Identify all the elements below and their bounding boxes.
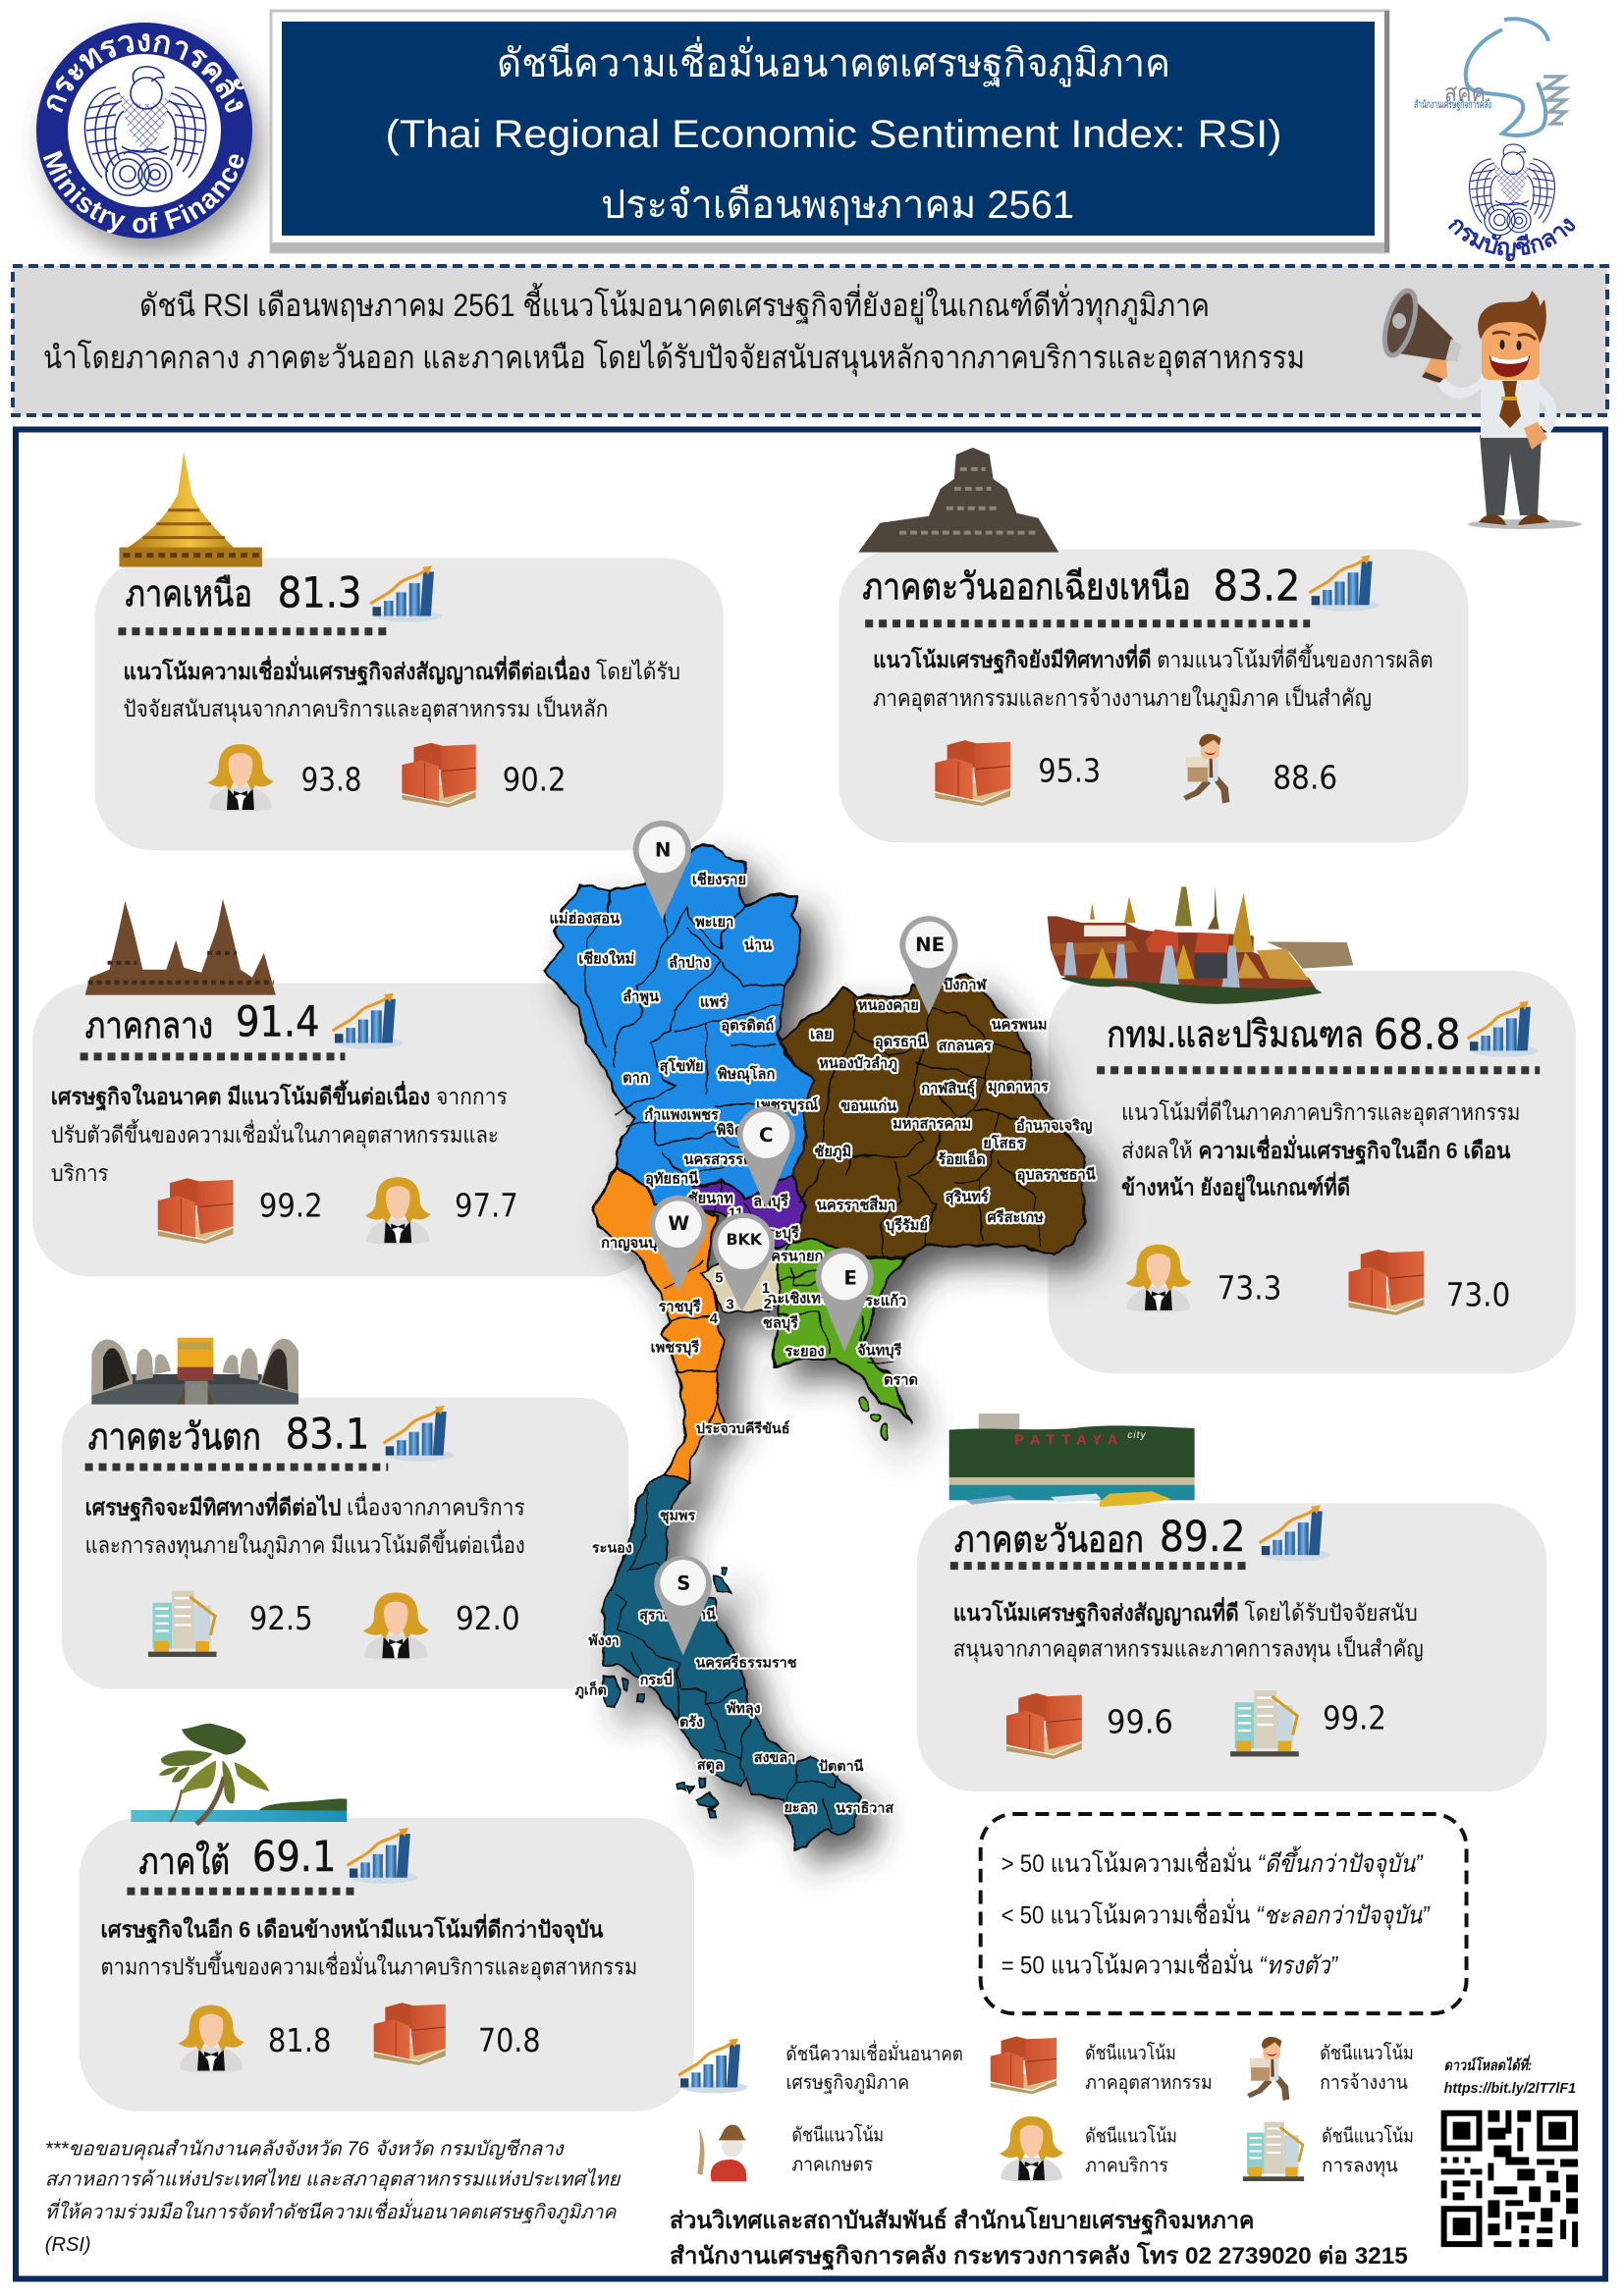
province labels north, central, west, east: พิจิตร [717, 1122, 751, 1139]
logo: FPO swirl: สำนักงานเศรษฐกิจการคลัง [1414, 99, 1491, 111]
province boundaries south [616, 1485, 838, 1828]
icon: industry [935, 740, 1010, 806]
province labels north, central, west, east: หนองบัวลำภู [819, 1055, 897, 1073]
province labels north, central, west, east: เลย [810, 1028, 833, 1043]
main frame [16, 430, 1605, 2279]
download note: https://bit.ly/2lT7lF1 [1444, 2080, 1576, 2097]
description 2: ปรับตัวดีขึ้นของความเชื่อมั่นในภาคอุตสาหกรรมและ [51, 1119, 499, 1148]
key: industry index [991, 2037, 1213, 2095]
service value: 73.3 [1218, 1269, 1281, 1307]
image: Ayutthaya ruins [85, 899, 276, 995]
province labels north, central, west, east: เพชรบุรี [651, 1340, 699, 1357]
key: service index: ดัชนีแนวโน้ม [1085, 2125, 1177, 2148]
heading: ภาคตะวันออก [954, 1520, 1144, 1561]
province labels north, central, west, east: ศรีสะเกษ [987, 1209, 1044, 1226]
logo: FPO swirl [1414, 19, 1565, 135]
index value: 91.4 [236, 997, 320, 1046]
panel: Central [32, 899, 658, 1276]
province labels south: ภูเก็ต [574, 1681, 607, 1699]
province labels north, central, west, east: ลพบุรี [753, 1194, 788, 1210]
province labels south: ตรัง [679, 1715, 703, 1731]
icon: service [363, 1592, 429, 1660]
province labels south: ระนอง [592, 1541, 632, 1557]
description bold: แนวโน้มความเชื่อมั่นเศรษฐกิจส่งสัญญาณที่ดีต่อเนื่อง โดยได้รับ [123, 656, 680, 686]
index value: 89.2 [1160, 1513, 1246, 1562]
province labels north, central, west, east: ระยอง [785, 1345, 825, 1361]
province labels north, central, west, east: สุโขทัย [660, 1057, 704, 1075]
province labels north, central, west, east: เพชรบูรณ์ [756, 1096, 819, 1115]
province labels north, central, west, east: ลำปาง [669, 954, 710, 971]
heading: ภาคกลาง [85, 1005, 213, 1046]
province labels north, central, west, east: ตาก [623, 1071, 649, 1087]
province labels north, central, west, east: สุรินทร์ [946, 1188, 989, 1205]
heading: กทม.และปริมณฑล [1107, 1014, 1364, 1055]
province labels north, central, west, east: แม่ฮ่องสอน [549, 912, 620, 928]
contact footer: ส่วนวิเทศและสถาบันสัมพันธ์ สำนักนโยบายเศรษฐกิจมหภาค [670, 2206, 1254, 2236]
key: industry index: ภาคอุตสาหกรรม [1085, 2072, 1213, 2095]
key: investment index [1243, 2122, 1414, 2181]
province labels north, central, west, east: อุดรธานี [875, 1034, 927, 1050]
region: central (purple) [691, 1176, 806, 1250]
logo: Comptroller General's Department: กรมบัญชีกลาง [1447, 218, 1575, 261]
panel: Bangkok and vicinity [1048, 886, 1576, 1373]
province labels north, central, west, east: ฉะเชิงเทรา [767, 1290, 837, 1307]
icon: service [365, 1177, 431, 1245]
province labels north, central, west, east: หนองคาย [858, 998, 919, 1014]
key: service index: ภาคบริการ [1085, 2155, 1168, 2176]
province labels north, central, west, east: 3 [726, 1298, 734, 1313]
region: south (teal) [602, 1475, 861, 1847]
pin: NE [899, 916, 958, 1015]
icon: industry [374, 2002, 446, 2065]
acknowledgement note: ***ขอขอบคุณสำนักงานคลังจังหวัด 76 จังหวัด กรมบัญชีกลาง [45, 2139, 565, 2162]
province boundaries north and northeast [584, 884, 1064, 1362]
title banner [271, 11, 1389, 252]
province labels south: สงขลา [754, 1750, 795, 1766]
icon: investment [148, 1591, 216, 1657]
index value: 83.2 [1214, 561, 1300, 611]
province labels north, central, west, east: สระบุรี [758, 1225, 799, 1242]
legend box: index thresholds [981, 1814, 1467, 2013]
acknowledgement note [45, 2139, 622, 2256]
province labels north, central, west, east: 5 [715, 1270, 724, 1286]
province labels south: สุราษฎร์ธานี [639, 1605, 716, 1623]
industry value: 95.3 [1038, 753, 1101, 790]
investment value: 92.5 [249, 1600, 313, 1637]
province labels north, central, west, east: สระแก้ว [856, 1293, 906, 1309]
province labels north, central, west, east: ร้อยเอ็ด [938, 1149, 986, 1168]
image: Grand Palace [1048, 886, 1353, 1004]
region: south islands [604, 1568, 730, 1818]
province labels south: นครศรีธรรมราช [696, 1654, 797, 1671]
legend line below 50: < 50 แนวโน้มความเชื่อมั่น “ชะลอกว่าปัจจุบัน” [1001, 1898, 1431, 1931]
summary panel [13, 266, 1607, 415]
region: west (orange) [594, 1166, 723, 1423]
heading: ภาคใต้ [138, 1841, 230, 1883]
region: northeast (brown) [779, 974, 1085, 1257]
download note: ดาวน์โหลดได้ที่: [1444, 2055, 1532, 2074]
legend line above 50: > 50 แนวโน้มความเชื่อมั่น “ดีขึ้นกว่าปัจจุบัน” [1001, 1845, 1424, 1879]
acknowledgement note: (RSI) [45, 2234, 91, 2256]
index value: 68.8 [1374, 1010, 1461, 1059]
province labels north, central, west, east: จันทบุรี [857, 1342, 902, 1359]
panel: North [95, 452, 724, 850]
region: Bangkok metropolitan (tan) [701, 1261, 779, 1311]
acknowledgement note: ที่ให้ความร่วมมือในการจัดทำดัชนีความเชื่อมั่นอนาคตเศรษฐกิจภูมิภาค [45, 2198, 617, 2224]
province labels north, central, west, east: นครพนม [992, 1017, 1048, 1033]
summary line 2: นำโดยภาคกลาง ภาคตะวันออก และภาคเหนือ โดยได้รับปัจจัยสนับสนุนหลักจากภาคบริการและอุตสาหกรรม [43, 340, 1305, 377]
index value: 81.3 [278, 568, 361, 617]
industry value: 73.0 [1446, 1276, 1510, 1313]
region: east (green) [773, 1240, 911, 1425]
pin: W: W [668, 1212, 689, 1235]
icon: service [179, 2005, 244, 2072]
investment value: 99.2 [1323, 1699, 1386, 1736]
industry value: 90.2 [503, 762, 567, 799]
logo: Ministry of Finance seal: กระทรวงการคลัง [47, 33, 244, 113]
province labels north, central, west, east: อุตรดิตถ์ [721, 1016, 774, 1034]
province labels north, central, west, east: ชัยภูมิ [814, 1144, 851, 1161]
pin: C [737, 1106, 795, 1208]
key: employment index: ดัชนีแนวโน้ม [1320, 2042, 1414, 2064]
icon: industry [402, 743, 476, 807]
province labels north, central, west, east: 11 [729, 1205, 743, 1221]
heading: ภาคตะวันตก [88, 1417, 261, 1459]
province labels north, central, west, east: ลำพูน [623, 988, 659, 1006]
description bold: เศรษฐกิจในอีก 6 เดือนข้างหน้ามีแนวโน้มที่ดีกว่าปัจจุบัน [101, 1913, 604, 1944]
pin: W [649, 1196, 708, 1292]
description: ปัจจัยสนับสนุนจากภาคบริการและอุตสาหกรรม เป็นหลัก [123, 694, 608, 722]
province labels north, central, west, east: เชียงใหม่ [578, 949, 634, 967]
province labels north, central, west, east: มุกดาหาร [988, 1080, 1049, 1095]
key: agriculture index: ภาคเกษตร [792, 2154, 873, 2175]
region: east islands [858, 1396, 888, 1439]
province labels north, central, west, east: พิษณุโลก [718, 1065, 776, 1083]
province labels south: กระบี่ [640, 1669, 673, 1688]
description line 2: ส่งผลให้ ความเชื่อมั่นเศรษฐกิจในอีก 6 เดือน [1121, 1135, 1511, 1165]
employment value: 88.6 [1272, 760, 1337, 797]
map of Thailand [546, 821, 1096, 1847]
title line 1: ดัชนีความเชื่อมั่นอนาคตเศรษฐกิจภูมิภาค [497, 36, 1170, 87]
province labels north, central, west, east: 4 [710, 1311, 719, 1327]
icon: service [1125, 1245, 1191, 1312]
region panels and key [32, 448, 1578, 2271]
image: Pattaya city hill: city [1127, 1430, 1147, 1441]
province labels north, central, west, east: ขอนแก่น [840, 1098, 896, 1114]
image: stone prasat [858, 448, 1058, 553]
pin: BKK: BKK [726, 1230, 763, 1249]
service value: 81.8 [268, 2022, 332, 2059]
icon: chart [1260, 1505, 1329, 1561]
key: agriculture index: ดัชนีแนวโน้ม [792, 2124, 884, 2147]
pin: E: E [843, 1266, 857, 1289]
map regions with shadow [546, 845, 1085, 1847]
icon: chart [383, 1406, 454, 1462]
icon: investment [1230, 1690, 1299, 1756]
region: north and lower north (blue) [546, 845, 814, 1210]
heading: ภาคตะวันออกเฉียงเหนือ [862, 566, 1191, 608]
heading: ภาคเหนือ [125, 573, 252, 614]
description bold: เศรษฐกิจจะมีทิศทางที่ดีต่อไป เนื่องจากภาคบริการ [85, 1491, 525, 1522]
panel: South [80, 1724, 694, 2111]
icon: industry [1349, 1250, 1424, 1315]
image: Pattaya city hill [949, 1414, 1195, 1507]
province labels north, central, west, east: สกลนคร [939, 1039, 992, 1054]
image: golden stupa [119, 452, 262, 567]
province labels north, central, west, east: น่าน [744, 938, 772, 954]
province labels north, central, west, east: ตราด [884, 1372, 918, 1388]
pin: S [654, 1556, 712, 1656]
key: employment index [1247, 2037, 1414, 2101]
description: และการลงทุนภายในภูมิภาค มีแนวโน้มดีขึ้นต่อเนื่อง [85, 1529, 525, 1559]
key: employment index: การจ้างงาน [1320, 2072, 1408, 2094]
index value: 69.1 [252, 1833, 337, 1882]
description bold: เศรษฐกิจในอนาคต มีแนวโน้มดีขึ้นต่อเนื่อง จากการ [51, 1080, 508, 1111]
key: regional sentiment index [678, 2039, 963, 2095]
province labels north, central, west, east: 2 [764, 1297, 772, 1312]
icon: industry [158, 1178, 234, 1244]
province labels south: ประจวบคีรีขันธ์ [696, 1419, 789, 1437]
icon: chart [1309, 556, 1380, 612]
description: สนุนจากภาคอุตสาหกรรมและภาคการลงทุน เป็นสำคัญ [953, 1634, 1424, 1663]
industry value: 99.6 [1107, 1703, 1173, 1740]
icon: chart [348, 1828, 417, 1884]
province labels north, central, west, east: เชียงราย [692, 872, 746, 888]
service value: 93.8 [301, 762, 361, 799]
icon: industry [1006, 1693, 1082, 1759]
province labels south: สตูล [697, 1758, 724, 1774]
province labels north, central, west, east: พะเยา [695, 915, 733, 931]
province labels north, central, west, east: กำแพงเพชร [644, 1106, 719, 1123]
contact footer: สำนักงานเศรษฐกิจการคลัง กระทรวงการคลัง โทร 02 2739020 ต่อ 3215 [670, 2241, 1408, 2271]
province labels north, central, west, east: บึงกาฬ [944, 977, 987, 993]
download note [1444, 2055, 1576, 2097]
province labels north, central, west, east: กาญจนบุรี [601, 1235, 665, 1252]
title line 2: (Thai Regional Economic Sentiment Index: RSI) [385, 113, 1282, 156]
title line 3: ประจำเดือนพฤษภาคม 2561 [601, 184, 1074, 227]
province labels north, central, west, east: บุรีรัมย์ [886, 1216, 928, 1234]
description bold: แนวโน้มเศรษฐกิจส่งสัญญาณที่ดี โดยได้รับปัจจัยสนับ [953, 1597, 1418, 1628]
province labels north, central, west, east: 1 [762, 1281, 770, 1297]
province labels north, central, west, east: อำนาจเจริญ [1016, 1117, 1092, 1134]
service value: 92.0 [456, 1600, 520, 1637]
key: service index [1000, 2116, 1177, 2182]
logo: FPO swirl: สคค. [1444, 80, 1491, 107]
key: industry index: ดัชนีแนวโน้ม [1085, 2042, 1176, 2064]
pin: C: C [759, 1124, 774, 1147]
icon: service [207, 744, 273, 812]
province labels north, central, west, east: อุบลราชธานี [1017, 1167, 1096, 1184]
province labels north, central, west, east: แพร่ [700, 995, 727, 1011]
key: investment index: การลงทุน [1322, 2155, 1398, 2177]
image: train on bridge [91, 1338, 298, 1405]
index value: 83.1 [286, 1411, 369, 1460]
logo: Comptroller General's Department [1447, 143, 1575, 261]
description line 1: แนวโน้มที่ดีในภาคภาคบริการและอุตสาหกรรม [1121, 1096, 1520, 1126]
province labels north, central, west, east: นครราชสีมา [817, 1198, 895, 1214]
pin: N [633, 821, 691, 920]
province labels north, central, west, east: ชัยนาท [688, 1191, 733, 1206]
mascot: man with megaphone [1379, 288, 1582, 529]
province labels south: ยะลา [785, 1800, 816, 1816]
province labels south: ชุมพร [660, 1508, 695, 1523]
panel: East [917, 1414, 1546, 1791]
description bold: แนวโน้มเศรษฐกิจยังมีทิศทางที่ดี ตามแนวโน้มที่ดีขึ้นของการผลิต [873, 644, 1434, 674]
key: investment index: ดัชนีแนวโน้ม [1322, 2125, 1414, 2148]
province labels south: ปัตตานี [819, 1758, 864, 1775]
summary line 1: ดัชนี RSI เดือนพฤษภาคม 2561 ชี้แนวโน้มอนาคตเศรษฐกิจที่ยังอยู่ในเกณฑ์ดีทั่วทุกภูมิภาค [139, 283, 1210, 325]
province labels north, central, west, east: ยโสธร [983, 1134, 1024, 1151]
panel: Northeast [839, 448, 1469, 842]
icon: chart [1468, 1001, 1538, 1057]
province labels north, central, west, east: อุทัยธานี [645, 1171, 698, 1188]
pin: NE: NE [915, 934, 945, 956]
image: palm beach [131, 1724, 347, 1824]
province labels south: พัทลุง [727, 1701, 761, 1717]
province labels south: พังงา [588, 1633, 620, 1649]
panel: West [62, 1338, 628, 1689]
description line 3: ข้างหน้า ยังอยู่ในเกณฑ์ที่ดี [1121, 1172, 1350, 1202]
legend line equal 50: = 50 แนวโน้มความเชื่อมั่น “ทรงตัว” [1001, 1948, 1339, 1979]
description: ภาคอุตสาหกรรมและการจ้างงานภายในภูมิภาค เป็นสำคัญ [873, 683, 1372, 712]
description: ตามการปรับขึ้นของความเชื่อมั่นในภาคบริการและอุตสาหกรรม [101, 1950, 637, 1980]
province labels north, central, west, east: นครนายก [761, 1250, 824, 1265]
province labels north, central, west, east: ราชบุรี [659, 1299, 701, 1315]
image: Pattaya city hill: PATTAYA [1014, 1433, 1118, 1449]
QR code [1441, 2110, 1578, 2247]
icon: employment [1183, 734, 1229, 804]
pin: E [816, 1248, 874, 1353]
province labels south [574, 1419, 893, 1817]
service value: 97.7 [455, 1188, 518, 1225]
province labels north, central, west, east: นครสวรรค์ [684, 1150, 753, 1168]
contact footer [670, 2206, 1408, 2271]
province labels north, central, west, east [549, 872, 1096, 1388]
icon: chart [333, 993, 403, 1049]
icon: chart [370, 565, 441, 622]
key: regional sentiment index: เศรษฐกิจภูมิภาค [786, 2072, 909, 2095]
industry value: 70.8 [478, 2022, 541, 2059]
province labels north, central, west, east: มหาสารคาม [893, 1116, 971, 1132]
province labels north, central, west, east: ชลบุรี [763, 1315, 798, 1332]
key: agriculture index [697, 2124, 884, 2181]
logo: Ministry of Finance seal [28, 21, 269, 266]
logo: Ministry of Finance seal: Ministry of Finance [43, 150, 244, 234]
province labels north, central, west, east: กาฬสินธุ์ [921, 1080, 975, 1097]
description 3: บริการ [51, 1160, 109, 1186]
pin: N: N [655, 839, 671, 862]
key: regional sentiment index: ดัชนีความเชื่อมั่นอนาคต [786, 2040, 963, 2065]
pin: BKK [713, 1213, 775, 1311]
pin: S: S [677, 1572, 690, 1594]
industry value: 99.2 [259, 1188, 323, 1225]
province labels south: นราธิวาส [836, 1800, 893, 1817]
acknowledgement note: สภาหอการค้าแห่งประเทศไทย และสภาอุตสาหกรรมแห่งประเทศไทย [45, 2167, 622, 2191]
